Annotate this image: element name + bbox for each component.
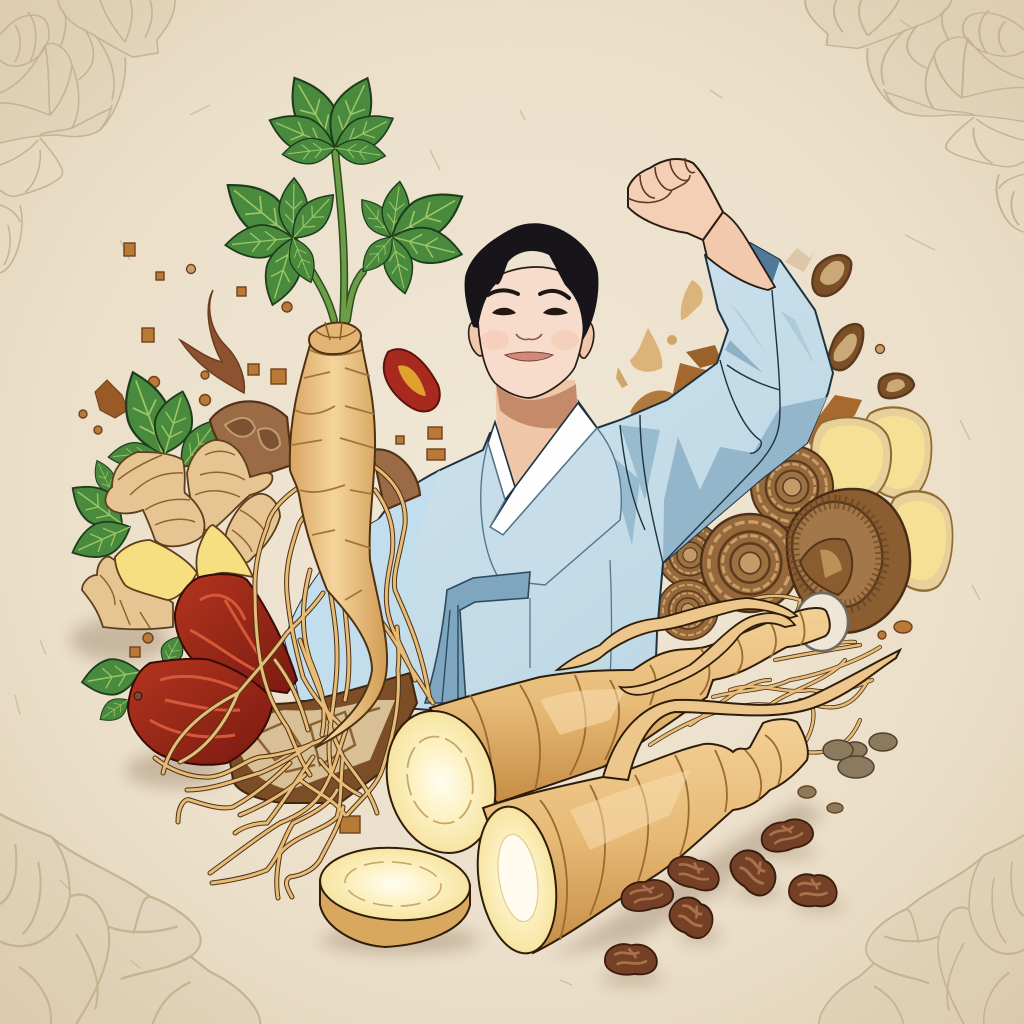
second thick root bbox=[620, 613, 795, 695]
lapel bbox=[481, 428, 621, 585]
brows bbox=[488, 290, 569, 298]
fine roots around tied end bbox=[650, 596, 880, 753]
dried jujubes bbox=[604, 816, 838, 976]
sleeve folds bbox=[605, 290, 815, 563]
right side: ginger slices bbox=[811, 407, 953, 591]
walnut bbox=[227, 673, 417, 803]
right side: shiitake mushrooms bbox=[658, 446, 910, 640]
man in hanbok bbox=[285, 158, 833, 710]
corner floral: bottom right bbox=[819, 835, 1024, 1024]
cheeks bbox=[481, 330, 579, 350]
fist bbox=[628, 159, 723, 240]
nose bbox=[516, 334, 542, 339]
main ginseng roots bbox=[155, 465, 433, 898]
sleeve shadow bbox=[663, 397, 827, 563]
flying herb pieces bbox=[79, 243, 912, 833]
ginseng plant leaves bbox=[215, 68, 472, 310]
white collar bbox=[488, 403, 597, 535]
cut ginseng root one bbox=[372, 593, 848, 865]
corner floral: top left bbox=[0, 0, 175, 273]
corner floral: bottom left bbox=[0, 814, 260, 1024]
small seeds bbox=[823, 733, 897, 778]
left body shading bbox=[285, 470, 440, 700]
ribbon tie bbox=[425, 572, 530, 703]
sleeve cuff lining bbox=[705, 243, 780, 290]
upper thick root bbox=[557, 598, 797, 670]
dried mushroom slices top right bbox=[812, 255, 914, 398]
red dates bbox=[128, 574, 297, 765]
neck bbox=[496, 380, 578, 487]
long thick root over the cut roots bbox=[603, 650, 900, 780]
brown mushroom behind ginger bbox=[210, 401, 420, 510]
ears bbox=[469, 322, 594, 358]
chin shadow bbox=[496, 384, 577, 428]
hair bbox=[465, 223, 598, 340]
cut ginseng root two bbox=[468, 719, 808, 959]
main ginseng body bbox=[290, 322, 387, 748]
red jujube slice bbox=[384, 349, 440, 411]
forearm bbox=[703, 212, 775, 290]
mouth bbox=[505, 352, 553, 361]
cap ring bbox=[796, 593, 848, 651]
left side: ginger root bbox=[82, 440, 280, 629]
ginseng plant stems bbox=[293, 150, 363, 322]
round ginseng slice bbox=[318, 844, 472, 947]
dried brown root strip bbox=[180, 290, 244, 393]
tan and brown dried herb chunks bbox=[95, 248, 862, 445]
robe bbox=[285, 243, 833, 710]
ground shadows bbox=[70, 618, 844, 986]
left leaves bbox=[62, 365, 229, 728]
eyes bbox=[492, 308, 568, 315]
face bbox=[478, 267, 584, 398]
corner floral: top right bbox=[805, 0, 1024, 232]
